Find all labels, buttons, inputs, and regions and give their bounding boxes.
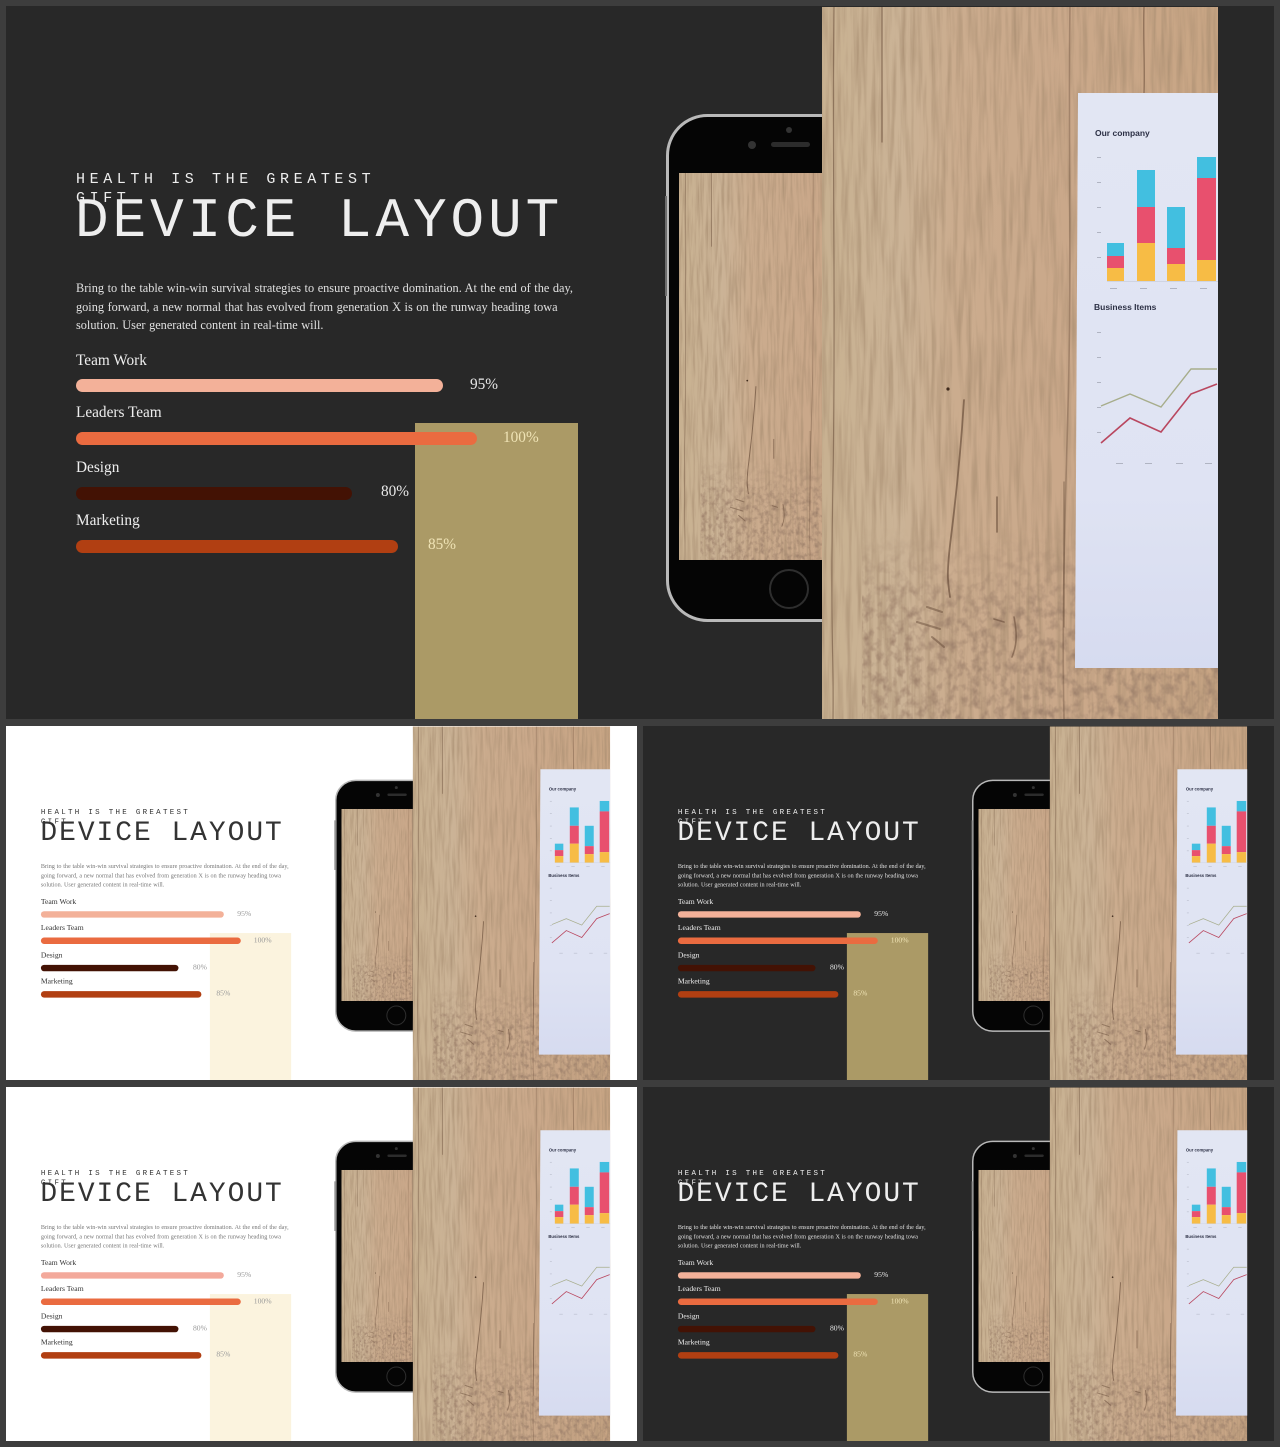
eyebrow text: HEALTH IS THE GREATEST GIFT [678, 1169, 827, 1187]
accent block [847, 933, 928, 1080]
paper with charts: Our company [1095, 128, 1150, 138]
wood photo [822, 7, 1218, 719]
description [76, 281, 573, 332]
description: solution. User generated content in real-time will. [76, 318, 324, 332]
bar: design [76, 487, 352, 500]
bar: team work [41, 911, 224, 918]
value: design: 80% [193, 1324, 207, 1332]
bar: team work [678, 1272, 861, 1279]
phone mockup [665, 114, 822, 622]
eyebrow text: HEALTH IS THE GREATEST GIFT [41, 808, 190, 826]
label: design: Design [41, 951, 63, 959]
label: marketing: Marketing [41, 1338, 73, 1347]
eyebrow text: HEALTH IS THE GREATEST GIFT [76, 171, 375, 207]
phone screen [978, 1170, 1050, 1362]
wood photo [412, 1088, 610, 1441]
bar: leaders team [41, 938, 241, 944]
label: leaders team: Leaders Team [678, 1285, 721, 1293]
paper with charts: Our company [549, 787, 577, 792]
value: design: 80% [193, 963, 207, 971]
bar: team work [76, 379, 443, 392]
phone screen [342, 809, 413, 1001]
description: Bring to the table win-win survival strategies to ensure proactive domination. At the end of the day, [76, 281, 573, 295]
phone screen [342, 1170, 413, 1362]
value: leaders team: 100% [254, 1297, 272, 1305]
description: solution. User generated content in real-time will. [41, 1242, 164, 1249]
value: leaders team: 100% [891, 936, 909, 944]
bar: design [678, 965, 815, 971]
panel: small dark slide bottom right [643, 1087, 1274, 1441]
paper with charts: Our company [1186, 1148, 1214, 1153]
value: team work: 95% [470, 376, 498, 393]
label: design: Design [41, 1312, 63, 1320]
panel: small light slide top left [6, 726, 637, 1080]
label: leaders team: Leaders Team [678, 924, 721, 932]
description: Bring to the table win-win survival strategies to ensure proactive domination. At the end of the day, [41, 1224, 289, 1230]
bar: design [41, 965, 178, 971]
bar: marketing [41, 991, 201, 998]
phone screen [679, 173, 822, 560]
paper with charts [1075, 93, 1218, 668]
phone mockup [334, 780, 413, 1032]
bar: team work [678, 911, 861, 918]
label: leaders team: Leaders Team [76, 404, 162, 421]
description: going forward, a new normal that has evolved from generation X is on the runway heading towa [76, 300, 558, 314]
phone mockup [334, 1140, 413, 1393]
paper with charts: Business Items [1185, 1234, 1217, 1239]
panel: small dark slide top right [643, 726, 1274, 1080]
value: team work: 95% [874, 910, 888, 918]
bar: leaders team [41, 1299, 241, 1305]
description [41, 863, 289, 888]
phone mockup [972, 780, 1050, 1032]
value: marketing: 85% [216, 989, 230, 998]
bar: design [41, 1326, 178, 1332]
label: team work: Team Work [41, 898, 76, 906]
value: team work: 95% [874, 1271, 888, 1279]
phone screen [978, 809, 1050, 1001]
value: marketing: 85% [428, 536, 456, 553]
bar: marketing [678, 1352, 838, 1359]
description: going forward, a new normal that has evolved from generation X is on the runway heading towa [41, 1233, 281, 1240]
wood photo [1050, 726, 1248, 1080]
value: leaders team: 100% [891, 1297, 909, 1305]
accent block [210, 1294, 291, 1441]
label: design: Design [76, 459, 119, 476]
label: team work: Team Work [678, 898, 713, 906]
bar: leaders team [678, 938, 878, 944]
title: DEVICE LAYOUT [40, 1178, 284, 1210]
bar: marketing [41, 1352, 201, 1359]
panel: large dark slide [6, 6, 1274, 719]
label: marketing: Marketing [76, 512, 140, 529]
paper with charts: Our company [549, 1148, 577, 1153]
paper with charts [1176, 1130, 1248, 1416]
label: marketing: Marketing [678, 977, 710, 986]
title: DEVICE LAYOUT [75, 189, 563, 253]
title: DEVICE LAYOUT [40, 817, 284, 849]
value: design: 80% [381, 483, 409, 500]
label: team work: Team Work [678, 1259, 713, 1267]
bar: leaders team [678, 1299, 878, 1305]
description: going forward, a new normal that has evolved from generation X is on the runway heading towa [678, 872, 918, 879]
description [678, 863, 926, 888]
accent block [415, 423, 578, 719]
bar: team work [41, 1272, 224, 1279]
label: design: Design [678, 1312, 700, 1320]
value: marketing: 85% [853, 1350, 867, 1359]
description: Bring to the table win-win survival strategies to ensure proactive domination. At the end of the day, [41, 863, 289, 869]
label: team work: Team Work [76, 352, 147, 369]
bar: design [678, 1326, 815, 1332]
wood photo [1050, 1088, 1248, 1441]
description: solution. User generated content in real-time will. [41, 881, 164, 888]
value: team work: 95% [237, 1271, 251, 1279]
description: Bring to the table win-win survival strategies to ensure proactive domination. At the end of the day, [678, 863, 926, 869]
title: DEVICE LAYOUT [677, 1178, 921, 1210]
accent block [847, 1294, 928, 1441]
panel: small light slide bottom left [6, 1087, 637, 1441]
paper with charts: Business Items [1094, 302, 1157, 312]
description: going forward, a new normal that has evolved from generation X is on the runway heading towa [41, 872, 281, 879]
value: marketing: 85% [216, 1350, 230, 1359]
bar: leaders team [76, 432, 477, 445]
description: solution. User generated content in real-time will. [678, 881, 801, 888]
paper with charts [538, 769, 610, 1055]
label: design: Design [678, 951, 700, 959]
description: going forward, a new normal that has evolved from generation X is on the runway heading towa [678, 1233, 918, 1240]
label: team work: Team Work [41, 1259, 76, 1267]
value: leaders team: 100% [503, 429, 539, 446]
eyebrow text: HEALTH IS THE GREATEST GIFT [41, 1169, 190, 1187]
paper with charts [538, 1130, 610, 1416]
phone mockup [972, 1140, 1050, 1393]
description: Bring to the table win-win survival strategies to ensure proactive domination. At the end of the day, [678, 1224, 926, 1230]
value: marketing: 85% [853, 989, 867, 998]
description: solution. User generated content in real-time will. [678, 1242, 801, 1249]
label: leaders team: Leaders Team [41, 924, 84, 932]
bar: marketing [76, 540, 398, 553]
paper with charts: Our company [1186, 787, 1214, 792]
title: DEVICE LAYOUT [677, 817, 921, 849]
accent block [210, 933, 291, 1080]
paper with charts: Business Items [548, 1234, 580, 1239]
description [41, 1224, 289, 1249]
paper with charts: Business Items [1185, 873, 1217, 878]
eyebrow text: HEALTH IS THE GREATEST GIFT [678, 808, 827, 826]
wood photo [412, 726, 610, 1080]
value: team work: 95% [237, 910, 251, 918]
label: leaders team: Leaders Team [41, 1285, 84, 1293]
value: leaders team: 100% [254, 936, 272, 944]
label: marketing: Marketing [41, 977, 73, 986]
label: marketing: Marketing [678, 1338, 710, 1347]
paper with charts: Business Items [548, 873, 580, 878]
bar: marketing [678, 991, 838, 998]
description [678, 1224, 926, 1249]
value: design: 80% [830, 1324, 844, 1332]
value: design: 80% [830, 963, 844, 971]
paper with charts [1176, 769, 1248, 1055]
